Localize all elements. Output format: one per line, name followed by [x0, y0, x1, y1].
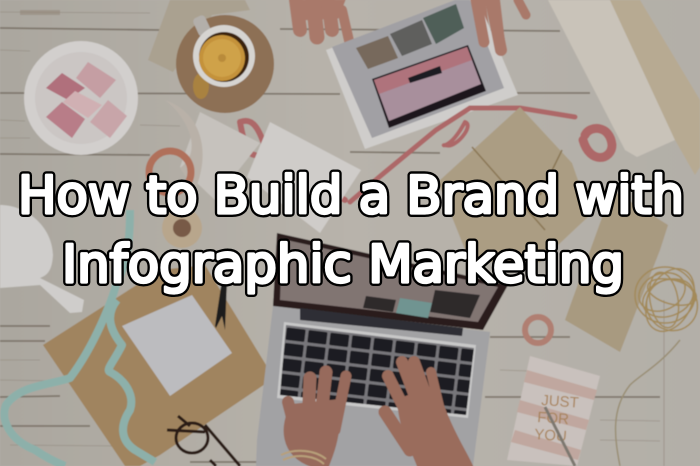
kraft paper parcel	[438, 107, 668, 352]
brown paper sheet	[43, 265, 274, 466]
notebook lettering lower	[534, 409, 570, 445]
round tin	[162, 208, 202, 248]
title line 2: Infographic Marketing	[62, 235, 624, 295]
orange tape ring	[149, 151, 191, 193]
greeting cards	[165, 100, 361, 233]
title line 1: How to Build a Brand with	[18, 166, 684, 226]
hands above tablet	[290, 0, 526, 50]
pen	[545, 407, 575, 466]
notebook lettering lower: FOR	[537, 409, 570, 428]
glasses	[167, 416, 240, 466]
striped notebook	[507, 356, 600, 466]
white teapot	[0, 205, 84, 313]
fingers resting on tablet edge	[476, 0, 526, 50]
left wrist bracelets	[281, 451, 326, 464]
plate with pink sweets	[24, 41, 138, 155]
cork coaster	[176, 15, 274, 113]
pink ribbon	[240, 108, 612, 202]
white paper roll	[548, 0, 675, 157]
laptop	[256, 233, 508, 466]
twine	[616, 261, 700, 466]
right hand typing	[385, 362, 472, 466]
notebook lettering: JUST	[541, 392, 579, 412]
white notebook	[122, 295, 232, 396]
tablet	[326, 0, 518, 149]
envelope under the tea	[148, 0, 250, 72]
scissors	[215, 280, 227, 330]
notebook lettering lower: YOU	[534, 426, 567, 445]
tea cup with lemon	[192, 14, 255, 99]
title line 1: How to Build a Brand with	[18, 166, 684, 226]
mint ribbon	[4, 210, 155, 466]
tan paper roll	[610, 0, 700, 175]
left hand typing	[285, 372, 346, 466]
title	[18, 166, 684, 295]
washi tape roll	[525, 317, 551, 343]
title line 2: Infographic Marketing	[62, 235, 624, 295]
